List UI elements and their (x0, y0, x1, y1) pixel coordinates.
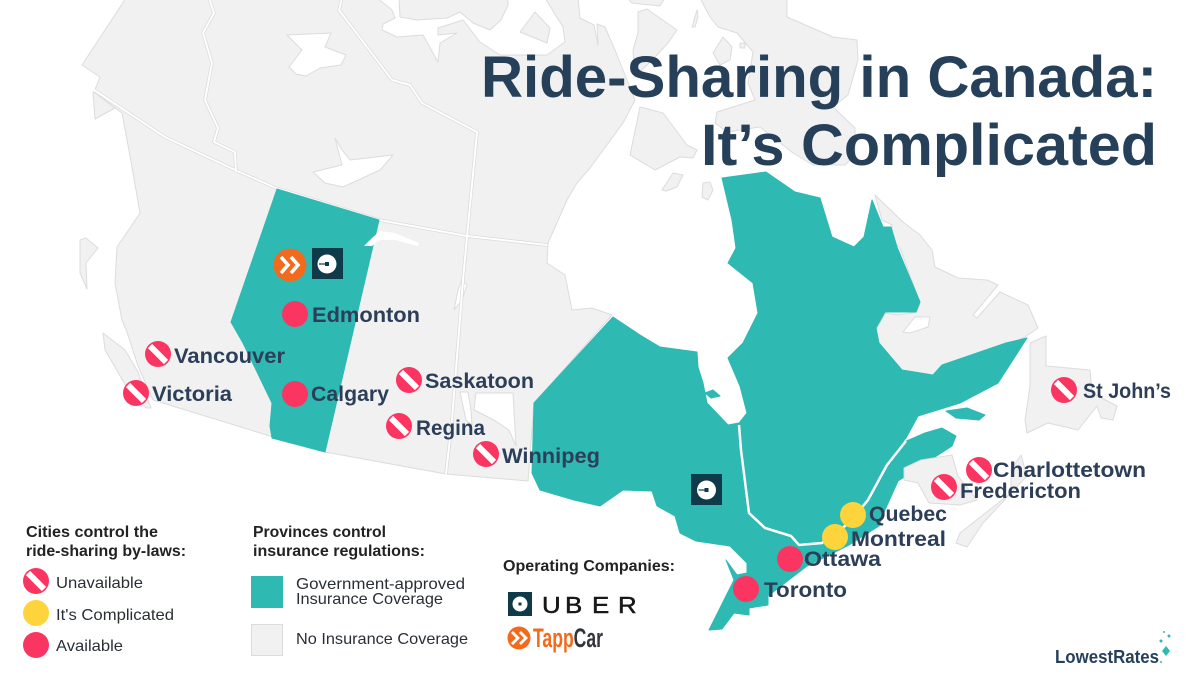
city: Winnipeg: Winnipeg (502, 445, 600, 468)
city: Fredericton (931, 474, 1081, 503)
legend item: complicated: It's Complicated (56, 607, 174, 624)
legend item: no coverage: No Insurance Coverage (296, 631, 468, 648)
city: Calgary: Calgary (311, 383, 389, 406)
lake: Reindeer (454, 280, 467, 310)
city: Charlottetown: Charlottetown (993, 459, 1146, 482)
legend item: available: Available (56, 638, 123, 655)
logo: TappCar (508, 623, 603, 653)
logo: Uber: UBER (542, 593, 637, 619)
city: Vancouver (145, 341, 285, 368)
legend heading line two: cities: ride-sharing by-laws: (26, 543, 186, 560)
icon: Uber in Alberta (312, 248, 343, 279)
icon: TappCar in Alberta (274, 248, 306, 282)
city: Vancouver: Vancouver (174, 345, 285, 368)
river: Ontario and Quebec border (739, 425, 906, 545)
region: western and northern provinces without coverage (82, 0, 635, 481)
icon: Uber in Ontario (691, 474, 722, 505)
lake: Smallwood (903, 317, 930, 333)
legend: operating companies (503, 558, 675, 653)
legend: cities (23, 524, 186, 658)
region: northern gulf water (377, 0, 565, 62)
city: Victoria (123, 380, 232, 406)
region: New Brunswick (904, 455, 977, 505)
city: Saskatoon: Saskatoon (425, 370, 534, 393)
city: Saskatoon (396, 367, 534, 393)
city: Quebec (840, 502, 947, 528)
island: panhandle (93, 92, 115, 119)
city: Quebec: Quebec (869, 503, 947, 526)
region: Labrador (875, 195, 1038, 377)
island: Vancouver Island (103, 333, 151, 408)
logo: LowestRates: LowestRates (1055, 647, 1159, 667)
city: Montreal: Montreal (851, 528, 946, 551)
island in northern gulf (520, 12, 550, 43)
legend heading line two: provinces: insurance regulations: (253, 543, 425, 560)
city: Edmonton (282, 301, 420, 327)
arctic islands (627, 0, 858, 200)
city: Ottawa (777, 546, 881, 572)
city: Regina: Regina (416, 417, 485, 440)
lake: Athabasca (364, 231, 419, 246)
logo: TappCar: TappCar (533, 623, 603, 653)
city: St John's (1051, 377, 1171, 403)
legend item: complicated (23, 600, 174, 626)
island: Anticosti (946, 408, 985, 420)
city: Montreal (822, 524, 946, 551)
city: Charlottetown (966, 457, 1146, 483)
legend item: unavailable: Unavailable (56, 575, 143, 592)
legend heading: provinces: Provinces control (253, 524, 386, 541)
title: It’s Complicated (701, 113, 1157, 178)
city: St John's: St John’s (1083, 380, 1171, 403)
region: Nova Scotia (956, 455, 1027, 547)
legend item: government-approved coverage (251, 576, 465, 608)
city: Ottawa: Ottawa (804, 548, 881, 571)
logo: LowestRates (1055, 631, 1170, 667)
city: Regina (386, 413, 485, 440)
lake: Manitoba (460, 392, 472, 425)
map of Canada (80, 0, 1117, 630)
title (481, 45, 1157, 178)
city: Fredericton: Fredericton (960, 480, 1081, 503)
city: Victoria: Victoria (152, 383, 232, 406)
legend heading: cities: Cities control the (26, 524, 158, 541)
region: Alberta with coverage (231, 189, 379, 452)
region: Newfoundland (1025, 336, 1117, 433)
legend heading: operating companies: Operating Companies: (503, 558, 675, 575)
city: Edmonton: Edmonton (312, 304, 420, 327)
lake: Great Bear (287, 33, 346, 76)
city: Winnipeg (473, 441, 600, 468)
island: James Bay (705, 390, 720, 398)
title: Ride-Sharing in Canada: (481, 45, 1157, 110)
city: Toronto: Toronto (764, 579, 847, 602)
legend item: available (23, 632, 123, 658)
legend item: government-approved coverage: Insurance Coverage (296, 591, 443, 608)
legend item: unavailable (23, 568, 143, 594)
lake: Winnipeg (474, 393, 516, 446)
lake: Great Slave (313, 138, 393, 187)
legend item: no coverage (252, 624, 468, 656)
legend: provinces (251, 524, 468, 656)
city: Toronto (733, 576, 847, 602)
city: Calgary (282, 381, 389, 407)
legend item: government-approved coverage: Government-approved (296, 576, 465, 593)
territory and province borders (94, 0, 547, 474)
region: Ontario and Quebec with coverage (532, 172, 1027, 630)
island: Haida Gwaii (80, 238, 98, 289)
